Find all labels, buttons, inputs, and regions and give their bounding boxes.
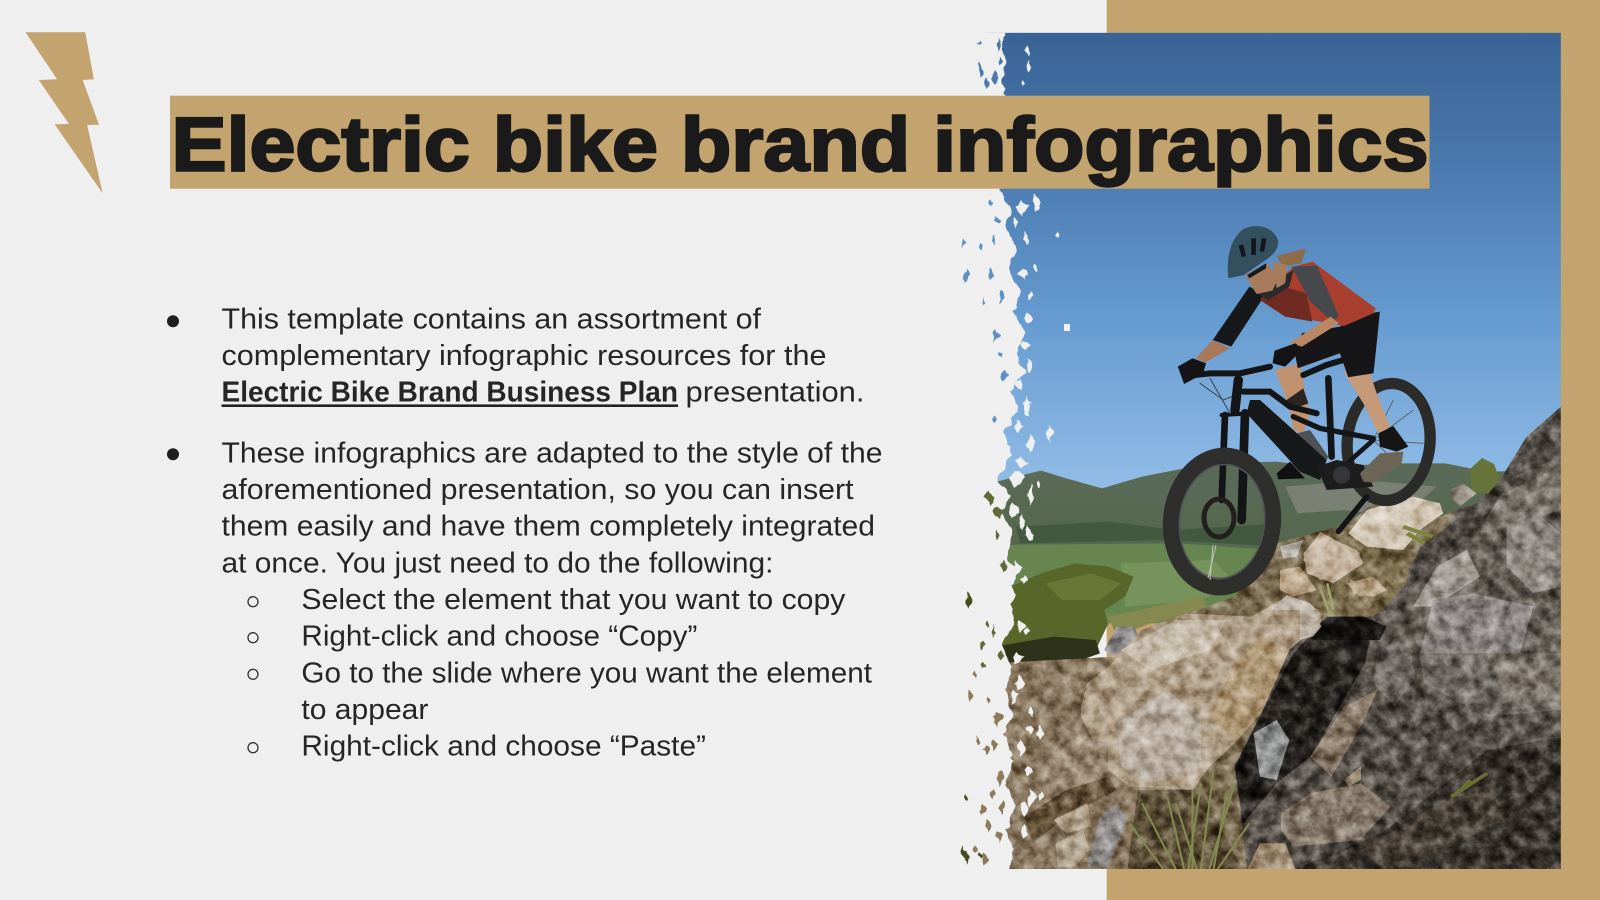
hair — [1277, 248, 1306, 267]
helmet — [1228, 226, 1278, 278]
title band — [170, 96, 1430, 189]
small bush on ridge — [1469, 458, 1500, 494]
line: aforementioned presentation, so you can insert — [222, 474, 854, 506]
step 1 marker — [248, 597, 258, 607]
step 4: Right-click and choose “Paste” — [301, 731, 706, 763]
bike and rider, traced from detail crop — [1185, 360, 1436, 532]
step 3 — [301, 657, 872, 726]
left leg — [1275, 363, 1328, 479]
white square fleck — [1064, 324, 1070, 331]
bullet 1 text block — [167, 303, 864, 409]
step 2 marker — [248, 633, 258, 643]
line: This template contains an assortment of — [222, 303, 761, 335]
right leg — [1343, 372, 1408, 483]
line: them easily and have them completely integrated — [222, 511, 875, 543]
jagged paint edge and splatter — [960, 32, 1060, 869]
lower slope, traced from lower crop — [1003, 458, 1561, 869]
step 3: to appear — [301, 694, 429, 726]
frame — [1185, 360, 1373, 532]
light flecks over photo — [1007, 45, 1060, 839]
line: complementary infographic resources for the — [222, 340, 826, 372]
step 1: Select the element that you want to copy — [301, 584, 846, 616]
line: presentation. — [686, 377, 864, 409]
sub-list of steps — [248, 584, 872, 763]
step 3 marker — [248, 669, 258, 679]
front wheel — [1164, 451, 1280, 592]
shorts — [1295, 312, 1380, 377]
sky — [985, 33, 1561, 503]
line: These infographics are adapted to the style of the — [222, 437, 882, 469]
back arm — [1178, 287, 1265, 384]
gold backing panel — [1107, 0, 1600, 900]
step 4 marker — [248, 743, 258, 753]
downtube battery — [1247, 400, 1327, 480]
distant mountains and valley — [991, 462, 1563, 623]
jersey — [1251, 262, 1376, 326]
upper rocks right of wheel, traced from detail crop — [1300, 407, 1561, 653]
grass tufts — [1129, 527, 1487, 869]
shrub — [1002, 563, 1207, 662]
bold link: Electric Bike Brand Business Plan — [222, 377, 678, 409]
blue flecks — [977, 38, 1003, 89]
motor and cranks — [1317, 460, 1373, 490]
icon: lightning bolt — [26, 32, 103, 193]
front arm — [1273, 317, 1339, 367]
rear wheel — [1341, 379, 1436, 505]
neck — [1273, 262, 1287, 288]
title: Electric bike brand infographics — [172, 103, 1428, 188]
olive and brown flecks — [966, 490, 1007, 669]
line: at once. You just need to do the following: — [222, 547, 774, 579]
rocks below rear wheel, traced from detail crop — [1270, 533, 1387, 610]
bullet marker — [167, 448, 179, 460]
photo: mountain biker on rocks — [945, 20, 1563, 880]
step 2: Right-click and choose “Copy” — [301, 621, 697, 653]
bullet marker — [167, 315, 179, 327]
bullet 2 text block — [167, 437, 882, 579]
step 3: Go to the slide where you want the element — [301, 657, 872, 689]
rocks — [991, 407, 1563, 870]
face — [1245, 263, 1279, 294]
rider upper body — [1178, 226, 1380, 384]
